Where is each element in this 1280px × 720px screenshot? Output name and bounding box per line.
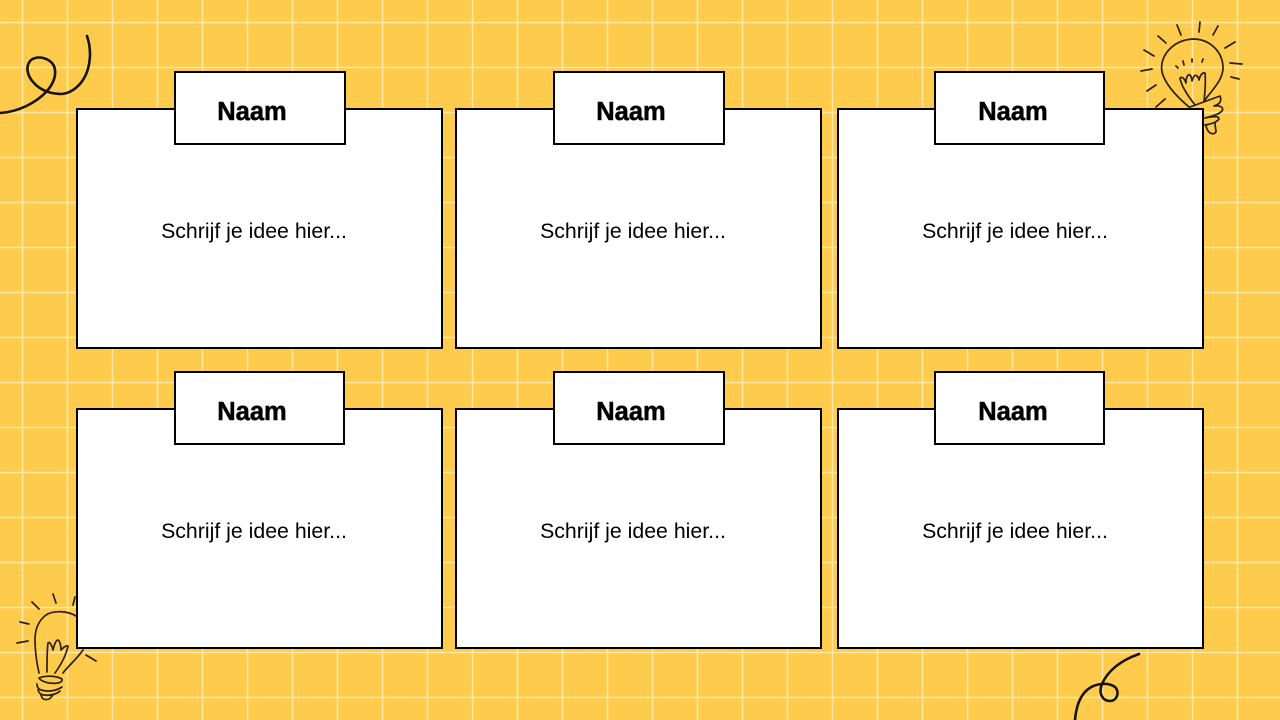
- tab: name 1: Naam: [217, 98, 287, 126]
- tab: name 1: [175, 72, 345, 144]
- tab: name 6: [935, 372, 1104, 444]
- text: idea 4: Schrijf je idee hier...: [161, 519, 347, 543]
- icon: light bulb top right: [1141, 22, 1242, 134]
- tab: name 6: Naam: [978, 398, 1048, 426]
- tab: name 3: Naam: [978, 98, 1048, 126]
- text: idea 1: Schrijf je idee hier...: [161, 219, 347, 243]
- panel: card 5: [456, 372, 821, 648]
- tab: name 3: [935, 72, 1104, 144]
- text: idea 5: Schrijf je idee hier...: [540, 519, 726, 543]
- panel: card 6: [838, 372, 1203, 648]
- panel: card 2: [456, 72, 821, 348]
- tab: name 2: [554, 72, 724, 144]
- panel: card 3: [838, 72, 1203, 348]
- panel: card 1: [77, 72, 442, 348]
- text: idea 6: Schrijf je idee hier...: [922, 519, 1108, 543]
- text: idea 2: Schrijf je idee hier...: [540, 219, 726, 243]
- tab: name 2: Naam: [596, 98, 666, 126]
- tab: name 5: [554, 372, 724, 444]
- tab: name 5: Naam: [596, 398, 666, 426]
- tab: name 4: Naam: [217, 398, 287, 426]
- panel: card 4: [77, 372, 442, 648]
- icon: light bulb bottom left: [17, 594, 96, 700]
- tab: name 4: [175, 372, 344, 444]
- icon: curl top left: [0, 36, 90, 113]
- icon: curl bottom right: [1075, 654, 1139, 720]
- text: idea 3: Schrijf je idee hier...: [922, 219, 1108, 243]
